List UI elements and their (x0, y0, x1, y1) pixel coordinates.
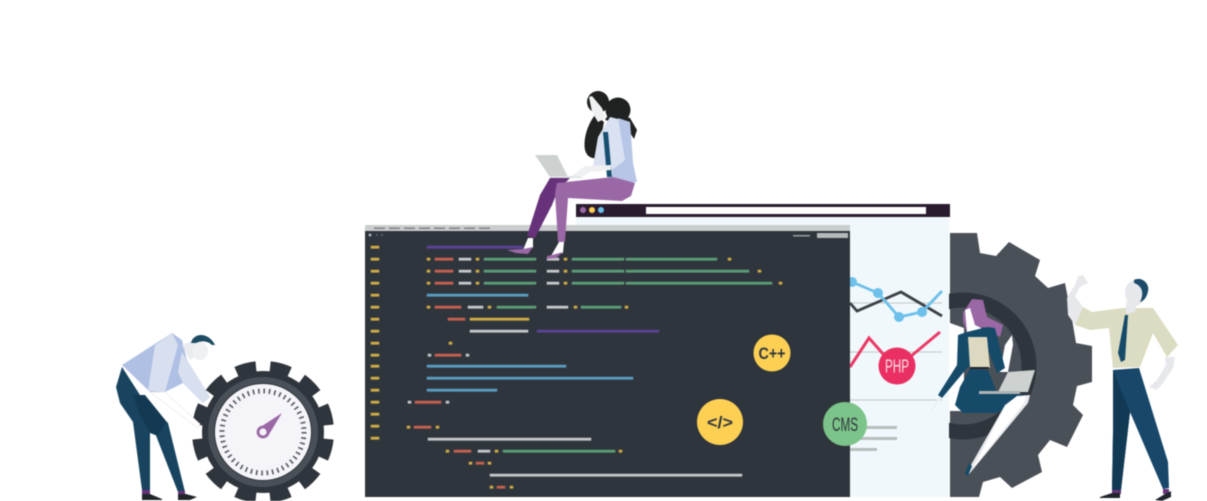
code: yellow tokens (407, 258, 782, 488)
code: blue tokens (427, 294, 633, 391)
figure: man with raised arm (1067, 275, 1178, 501)
badge: PHP: PHP (885, 356, 909, 376)
badge: CMS (823, 402, 867, 446)
code: green tokens (484, 258, 772, 452)
code: grey tokens (408, 258, 742, 476)
figure: woman seated in gear with laptop (927, 299, 1035, 476)
figure: woman sitting with laptop (507, 91, 637, 259)
code editor window (365, 225, 850, 497)
text lines in browser page (850, 426, 897, 451)
line number markers (371, 246, 379, 439)
badge: code tag (697, 399, 743, 445)
gauge gear with dial (198, 367, 328, 497)
badge: code tag: </> (707, 413, 733, 432)
code: purple tokens (427, 246, 659, 332)
large background gear (897, 233, 1092, 497)
badge: C++: C++ (758, 344, 786, 363)
code: red tokens (414, 258, 505, 488)
badge: CMS: CMS (832, 415, 858, 436)
browser window: header bar and pale page (576, 204, 950, 497)
line charts in browser page (847, 277, 942, 400)
figure: man pushing gauge gear (116, 333, 215, 500)
badge: PHP (878, 348, 916, 384)
badge: C++ (754, 334, 790, 372)
